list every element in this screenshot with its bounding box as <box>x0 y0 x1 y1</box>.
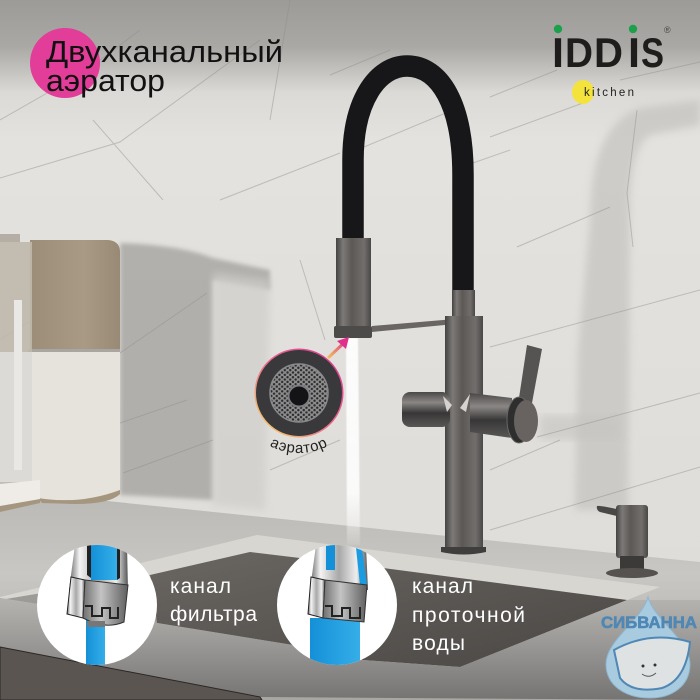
highlight on junction <box>443 394 470 412</box>
lever handle <box>519 345 542 403</box>
sink basin <box>150 552 627 667</box>
label: flow water channel: проточной <box>412 604 525 627</box>
counter dark front edge <box>0 647 262 700</box>
faucet arm <box>372 319 455 332</box>
mixer cap ring <box>507 397 531 443</box>
watermark: Sibvanna logo <box>601 597 697 698</box>
mixer body <box>470 393 512 438</box>
faucet <box>334 66 542 554</box>
logo wordmark: S <box>641 29 664 76</box>
faucet base <box>441 547 486 554</box>
flow channel cross-section <box>308 545 368 668</box>
logo wordmark <box>552 29 664 76</box>
logo wordmark: I <box>628 29 640 76</box>
title: Двухканальный <box>46 34 283 69</box>
counter front section <box>0 598 700 700</box>
sink rim <box>0 535 660 600</box>
aerator mesh <box>270 364 328 422</box>
title accent blob <box>30 28 100 98</box>
filter water stub <box>402 392 450 427</box>
arrow to spout <box>328 337 349 358</box>
aerator centre hole <box>288 386 310 406</box>
mixer cap face <box>514 400 538 442</box>
title: аэратор <box>46 63 165 98</box>
label: filter channel: фильтра <box>170 603 257 626</box>
faucet collar <box>452 290 475 319</box>
countertop <box>0 490 700 700</box>
registered mark: ® <box>664 25 671 35</box>
circle background <box>37 545 157 665</box>
circle background <box>277 545 397 665</box>
faucet flexible hose <box>353 66 463 292</box>
logo wordmark: I <box>552 29 564 76</box>
aerator gradient ring <box>254 348 344 438</box>
logo wordmark: D <box>594 29 623 76</box>
faucet spray head cap <box>334 326 372 338</box>
label: filter channel: канал <box>170 575 231 598</box>
watermark drop <box>606 597 690 698</box>
label aerator: аэратор <box>270 440 326 456</box>
label: flow water channel: воды <box>412 632 465 655</box>
filter channel cross-section <box>67 540 128 670</box>
kitchen yellow blob <box>572 80 594 104</box>
filter channel diagram <box>37 540 157 670</box>
faucet column <box>445 316 483 548</box>
flow channel diagram <box>277 545 397 668</box>
soap dispenser <box>597 505 658 578</box>
logo wordmark: D <box>565 29 593 76</box>
container: kitchen appliance <box>0 234 120 512</box>
sink left inner wall <box>0 575 157 623</box>
logo green dots <box>554 25 637 33</box>
faucet pull-out neck <box>336 238 371 327</box>
label: flow water channel: канал <box>412 575 473 598</box>
aerator rubber body <box>256 350 342 436</box>
water stream <box>346 338 360 545</box>
logo <box>552 25 671 104</box>
kitchen label: kitchen <box>584 87 634 99</box>
watermark bathtub <box>614 638 690 690</box>
aerator callout <box>254 337 349 456</box>
watermark wordmark: СИБВАННА <box>601 613 697 632</box>
